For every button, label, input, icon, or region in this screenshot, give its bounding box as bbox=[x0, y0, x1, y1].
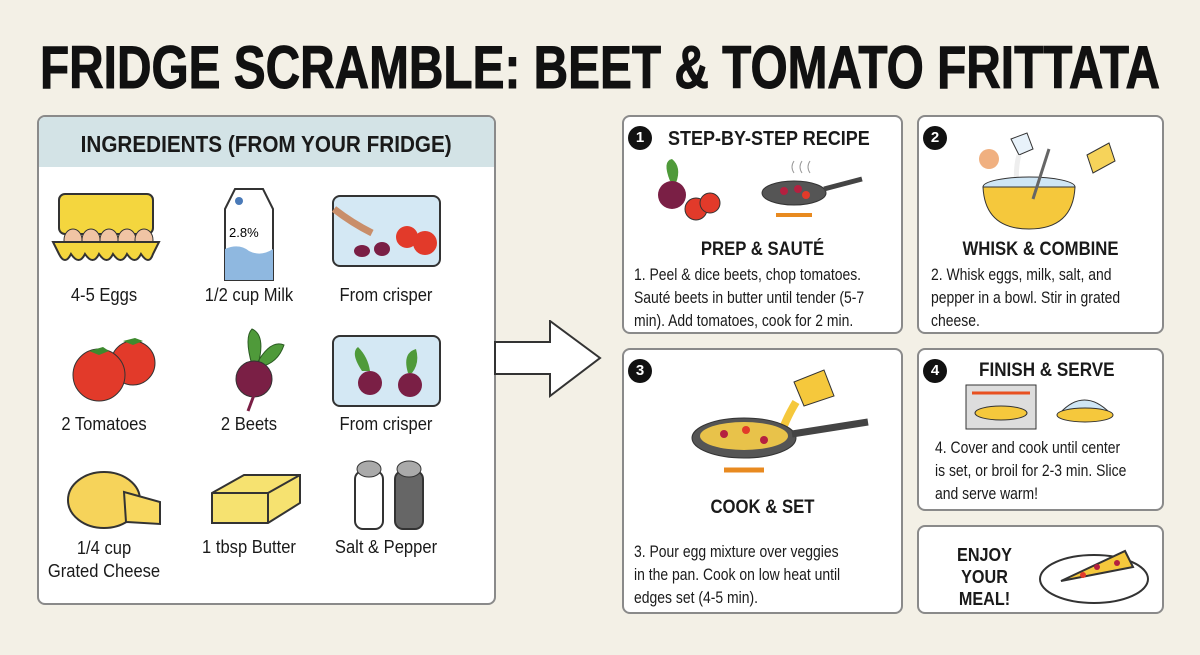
panel: enjoy bbox=[917, 525, 1164, 614]
panel: step 4 bbox=[917, 348, 1164, 511]
step number 4 bbox=[923, 359, 947, 383]
label: eggs: 4-5 Eggs bbox=[71, 285, 137, 305]
icon: salt and pepper bbox=[354, 460, 424, 530]
label: cheese: Grated Cheese bbox=[48, 561, 160, 581]
icon: oven and covered pan bbox=[966, 384, 1114, 430]
step 3 text: edges set (4-5 min). bbox=[634, 588, 758, 607]
step 1 text: min). Add tomatoes, cook for 2 min. bbox=[634, 311, 853, 330]
icon: frittata slice on plate bbox=[1039, 550, 1149, 604]
label: salt and pepper: Salt & Pepper bbox=[335, 537, 437, 557]
step number 2 bbox=[923, 126, 947, 150]
step 4 text bbox=[935, 438, 1126, 503]
label: milk: 1/2 cup Milk bbox=[205, 285, 293, 305]
step number 4: 4 bbox=[931, 362, 939, 379]
ingredients heading: INGREDIENTS (FROM YOUR FRIDGE) bbox=[81, 131, 452, 157]
panel: step 3 bbox=[622, 348, 903, 614]
step 1 text: 1. Peel & dice beets, chop tomatoes. bbox=[634, 265, 861, 284]
icon: pouring egg into pan bbox=[692, 369, 868, 472]
step 4 text: and serve warm! bbox=[935, 484, 1038, 503]
step 2 text: cheese. bbox=[931, 311, 980, 330]
step 3 text: in the pan. Cook on low heat until bbox=[634, 565, 840, 584]
step number 1 bbox=[628, 126, 652, 150]
icon: cheese bbox=[67, 471, 161, 529]
arrow bbox=[494, 320, 602, 398]
step 1 heading: STEP-BY-STEP RECIPE bbox=[668, 128, 870, 150]
step 1 text: Sauté beets in butter until tender (5-7 bbox=[634, 288, 864, 307]
label: crisper 1: From crisper bbox=[340, 285, 432, 305]
step 2 text bbox=[931, 265, 1120, 330]
step 2 subheading: WHISK & COMBINE bbox=[962, 239, 1119, 260]
step 4 heading: FINISH & SERVE bbox=[979, 360, 1115, 381]
icon: butter bbox=[211, 474, 301, 524]
icon: tomatoes bbox=[72, 338, 156, 402]
icon: beet and tomato bbox=[658, 159, 720, 220]
step 4 text: is set, or broil for 2-3 min. Slice bbox=[935, 461, 1126, 480]
step 2 text: 2. Whisk eggs, milk, salt, and bbox=[931, 265, 1112, 284]
icon: bowl whisk bbox=[979, 132, 1116, 230]
ingredients heading bbox=[39, 117, 494, 167]
step 3 text bbox=[634, 542, 840, 607]
panel: ingredients bbox=[37, 115, 496, 605]
step 2 text: pepper in a bowl. Stir in grated bbox=[931, 288, 1120, 307]
enjoy text bbox=[957, 545, 1012, 609]
label: cheese: 1/4 cup bbox=[77, 538, 131, 558]
step number 1: 1 bbox=[636, 129, 644, 146]
step 1 text bbox=[634, 265, 864, 330]
icon: eggs bbox=[51, 193, 161, 261]
step number 2: 2 bbox=[931, 129, 939, 146]
label: crisper 2: From crisper bbox=[340, 414, 432, 434]
step 3 text: 3. Pour egg mixture over veggies bbox=[634, 542, 839, 561]
step 3 subheading: COOK & SET bbox=[710, 497, 815, 518]
enjoy text: ENJOY bbox=[957, 545, 1012, 565]
enjoy text: MEAL! bbox=[959, 589, 1010, 609]
enjoy text: YOUR bbox=[961, 567, 1008, 587]
step number 3: 3 bbox=[636, 362, 644, 379]
label: beets: 2 Beets bbox=[221, 414, 277, 434]
panel: step 1 bbox=[622, 115, 903, 334]
icon: crisper 2 bbox=[332, 335, 441, 407]
step 1 subheading: PREP & SAUTÉ bbox=[701, 239, 824, 260]
label: tomatoes: 2 Tomatoes bbox=[61, 414, 147, 434]
panel: step 2 bbox=[917, 115, 1164, 334]
label: cheese bbox=[48, 538, 160, 581]
icon: pan on stove bbox=[762, 160, 863, 217]
icon: beets bbox=[236, 328, 285, 412]
icon: milk: 2.8% bbox=[229, 225, 259, 240]
icon: milk bbox=[224, 188, 274, 281]
step 4 text: 4. Cover and cook until center bbox=[935, 438, 1120, 457]
icon: crisper 1 bbox=[332, 195, 441, 267]
label: butter: 1 tbsp Butter bbox=[202, 537, 296, 557]
step number 3 bbox=[628, 359, 652, 383]
